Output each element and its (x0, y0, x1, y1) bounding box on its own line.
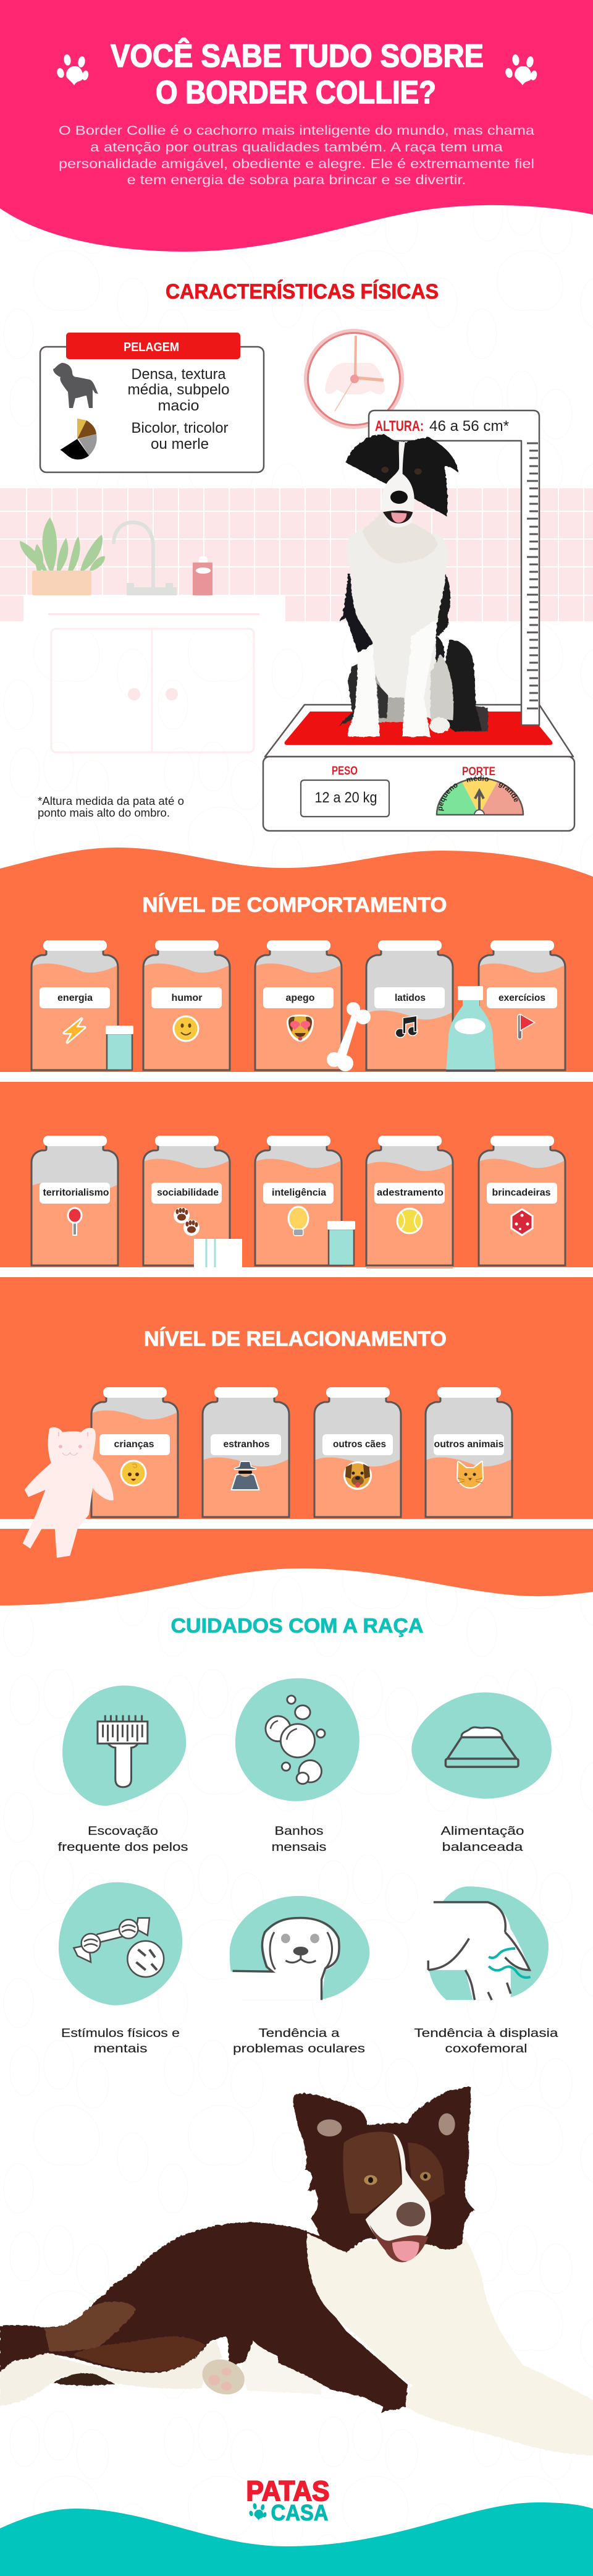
title: O BORDER COLLIE? (156, 75, 436, 111)
caption: estímulos: Estímulos físicos e (61, 2026, 180, 2040)
intro text: a atenção por outras qualidades também. A raça tem uma (90, 140, 503, 155)
coat text (127, 366, 230, 453)
scale top (265, 705, 573, 757)
teal bottle (446, 986, 495, 1072)
ruler ticks (527, 443, 538, 708)
footer wave (0, 2502, 593, 2576)
peso label: PESO (332, 765, 358, 778)
caption: problemas oculares: problemas oculares (233, 2042, 365, 2055)
label: exercícios: exercícios (498, 993, 545, 1003)
icon: lightning (64, 1019, 85, 1042)
jar: energia (30, 940, 119, 1070)
tile wall (0, 488, 593, 621)
blob: hip (416, 1887, 549, 2000)
intro text: personalidade amigável, obediente e alegre. Ele é extremamente fiel (59, 157, 534, 171)
coat text: média, subpelo (127, 381, 230, 398)
label: energia: energia (57, 993, 93, 1003)
label: latidos: latidos (395, 993, 426, 1003)
panel tab (66, 333, 240, 359)
intro text: O Border Collie é o cachorro mais inteligente do mundo, mas chama (59, 124, 534, 138)
title: VOCÊ SABE TUDO SOBRE (111, 38, 484, 74)
title (111, 38, 484, 111)
label: adestramento: adestramento (377, 1188, 444, 1198)
height label: ALTURA: (375, 418, 424, 435)
logo: casa: CASA (271, 2500, 329, 2525)
jar: humor (142, 940, 231, 1070)
counter (23, 595, 285, 632)
panel: pelagem (40, 333, 264, 472)
jar: crianças (90, 1387, 179, 1517)
icon: flag (518, 1015, 534, 1039)
footnote (38, 795, 184, 819)
coat text: ou merle (151, 436, 209, 453)
jar: sociabilidade (142, 1136, 231, 1265)
coat text: Bicolor, tricolor (131, 420, 229, 436)
illustration: clock (306, 331, 402, 427)
label: humor: humor (172, 993, 203, 1003)
red mat (284, 712, 552, 745)
photo: sitting border collie (339, 434, 488, 737)
icon: tennis ball (397, 1209, 422, 1233)
shelf 2 (0, 1267, 593, 1277)
porte label: PORTE (462, 765, 495, 778)
panel box (40, 347, 264, 472)
label: outros animais: outros animais (434, 1439, 504, 1450)
orange section (0, 848, 593, 1605)
peso value (301, 780, 389, 817)
caption: balanceada: balanceada (442, 1840, 523, 1854)
dog hindquarters (0, 2222, 326, 2406)
porte gauge: médio (466, 775, 489, 783)
heading: nível de comportamento: NÍVEL DE COMPORTAMENTO (142, 893, 447, 917)
heading: cuidados com a raça: CUIDADOS COM A RAÇA (170, 1614, 424, 1637)
caption: mensais: mensais (272, 1840, 327, 1854)
height ruler (369, 410, 539, 725)
icon: cat face (458, 1462, 482, 1487)
care captions (58, 1824, 558, 2055)
icon: paw prints (174, 1207, 200, 1236)
logo: patas: PATAS (246, 2475, 330, 2507)
jar: apego (254, 940, 343, 1070)
label: brincadeiras: brincadeiras (492, 1188, 551, 1198)
label: sociabilidade: sociabilidade (157, 1188, 219, 1198)
caption: tendência a: Tendência a (258, 2026, 340, 2040)
dog chest and head (278, 2086, 593, 2455)
icon: dog silhouette (53, 363, 98, 408)
footnote: *Altura medida da pata até o (38, 795, 184, 807)
teal cup 2 (327, 1221, 355, 1265)
icon: paw right (505, 54, 538, 85)
jar: estranhos (201, 1387, 290, 1517)
intro text (59, 124, 534, 187)
faucet (114, 522, 177, 595)
tab label: PELAGEM (124, 341, 179, 354)
icon: dice (511, 1209, 532, 1235)
jar: brincadeiras (477, 1136, 566, 1265)
teal cup 1 (106, 1026, 133, 1070)
illustration: bathroom background (0, 488, 593, 752)
porte gauge: grande (498, 782, 518, 802)
label: apego: apego (285, 993, 315, 1003)
shelf 3 (0, 1519, 593, 1529)
care icons (59, 1678, 552, 2005)
height label: 46 a 56 cm* (429, 418, 509, 435)
caption: frequente: frequente dos pelos (58, 1840, 188, 1854)
scale platform (262, 704, 576, 832)
label: estranhos: estranhos (224, 1439, 269, 1450)
caption: escovação: Escovação (88, 1824, 158, 1838)
intro text: e tem energia de sobra para brincar e se divertir. (127, 173, 466, 187)
porte gauge: pequeno (439, 784, 457, 811)
icon: heart-eyed dog (287, 1014, 314, 1042)
jar: outros cães (313, 1387, 402, 1517)
icon: paw left (56, 54, 90, 85)
blob: food bowl (411, 1693, 552, 1799)
label: crianças: crianças (114, 1439, 154, 1450)
scale box (263, 757, 574, 831)
icon: dog face (343, 1461, 372, 1490)
caption: mentais: mentais (94, 2042, 148, 2055)
cabinet (51, 629, 254, 752)
shelf 1 (0, 1072, 593, 1082)
caption: coxofemoral: coxofemoral (445, 2042, 528, 2055)
porte gauge (436, 775, 524, 816)
blob: toys (59, 1882, 182, 2005)
icon: light bulb (288, 1207, 308, 1235)
blob: brush (62, 1686, 186, 1806)
logo: paw (248, 2503, 267, 2520)
icon: spy (232, 1462, 258, 1489)
label: outros cães: outros cães (333, 1439, 386, 1450)
jar: territorialismo (30, 1136, 119, 1265)
label: inteligência: inteligência (272, 1188, 326, 1198)
peso value: 12 a 20 kg (315, 789, 377, 806)
tissue box (194, 1239, 242, 1268)
header wave (0, 0, 593, 252)
blob: dog eyes (227, 1896, 369, 2000)
teddy bear (23, 1427, 114, 1558)
heading: nível de relacionamento: NÍVEL DE RELACIONAMENTO (144, 1327, 447, 1351)
jar: outros animais (424, 1387, 513, 1517)
bone (327, 1002, 371, 1071)
icon: colour pie (60, 419, 97, 459)
logo (246, 2475, 330, 2525)
height label (375, 418, 509, 435)
plant (20, 517, 105, 595)
bottle (193, 556, 212, 595)
jar: adestramento (365, 1136, 454, 1269)
jar: inteligência (254, 1136, 343, 1265)
caption: banhos: Banhos (274, 1824, 324, 1838)
coat text: Densa, textura (131, 366, 226, 383)
icon: baby (121, 1461, 146, 1486)
photo: lying border collie (0, 2086, 593, 2455)
icon: smile (174, 1016, 198, 1041)
icon: music note (396, 1016, 417, 1037)
label: territorialismo: territorialismo (43, 1188, 109, 1198)
header (0, 0, 593, 252)
jar: exercícios (477, 940, 566, 1070)
icon: pin (68, 1208, 82, 1235)
footnote: ponto mais alto do ombro. (38, 807, 170, 819)
blob: bubbles (235, 1678, 360, 1801)
jar: latidos (365, 940, 454, 1070)
caption: displasia: Tendência à displasia (414, 2026, 558, 2040)
coat text: macio (158, 397, 199, 414)
caption: alimentação: Alimentação (441, 1824, 524, 1838)
heading: características físicas: CARACTERÍSTICAS FÍSICAS (166, 280, 439, 304)
